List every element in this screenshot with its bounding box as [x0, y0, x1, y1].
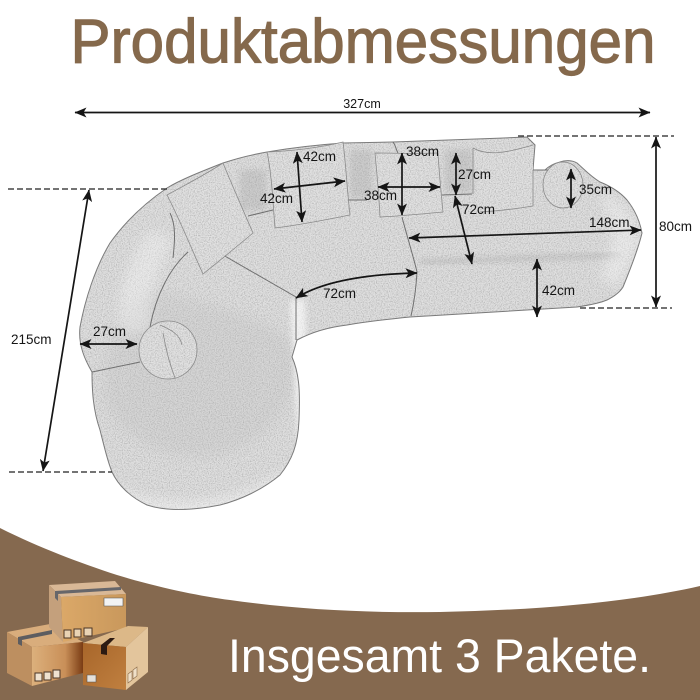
dimension: pillow height 42cm: 42cm [303, 149, 336, 164]
dimension: arm 27cm [80, 324, 137, 344]
pillow: right square [473, 145, 533, 212]
footer text: Insgesamt 3 Pakete. [228, 629, 651, 682]
brown footer band [0, 528, 700, 700]
dimension: pillow height 42cm [297, 149, 336, 222]
dimension: seat height 42cm: 42cm [542, 283, 575, 298]
round pillow: left [139, 321, 197, 379]
dimension: backrest 27cm: 27cm [458, 167, 491, 182]
dimension: seat curve 72cm: 72cm [323, 286, 356, 301]
dimension: total width 327cm: 327cm [343, 97, 381, 111]
dimension: pillow width 38cm: 38cm [364, 188, 397, 203]
sofa seams [92, 142, 548, 372]
dashed guides [8, 136, 674, 472]
round pillow: right [543, 162, 583, 208]
box: right [83, 626, 148, 690]
icon: stacked cardboard boxes [7, 581, 148, 690]
pillow: 38 cm [375, 153, 443, 217]
box: left [7, 624, 83, 686]
dimension: arm 27cm: 27cm [93, 324, 126, 339]
dimension: pillow width 42cm: 42cm [260, 191, 293, 206]
dimension: seat height 42cm [537, 259, 575, 317]
sofa body [80, 137, 642, 510]
dimension: seat depth 72cm: 72cm [462, 202, 495, 217]
dimension: pillow height 38cm [402, 144, 439, 215]
sofa illustration [80, 137, 642, 525]
dimension: pillow width 42cm [260, 181, 345, 206]
dimension: section width 148cm [409, 215, 641, 238]
sofa shading [100, 150, 640, 525]
dimension: section width 148cm: 148cm [589, 215, 630, 230]
pillow: left large [167, 163, 253, 274]
dimension: pillow width 38cm [364, 187, 440, 203]
dimension: seat curve 72cm [296, 273, 417, 301]
box: top [49, 581, 126, 642]
dimension lines [8, 97, 692, 472]
dimension: length 215cm: 215cm [11, 332, 52, 347]
sofa outline [80, 137, 642, 510]
title: Produktabmessungen [70, 6, 656, 76]
dimension: round pillow 35cm: 35cm [579, 182, 612, 197]
dimension: length 215cm [11, 190, 89, 471]
dimension: pillow height 38cm: 38cm [406, 144, 439, 159]
dimension: seat depth 72cm [455, 196, 495, 264]
dimension: total height 80cm: 80cm [659, 219, 692, 234]
dimension: backrest 27cm [456, 153, 491, 195]
dimension: round pillow 35cm [571, 169, 612, 208]
pillow: 42 cm [267, 142, 350, 228]
